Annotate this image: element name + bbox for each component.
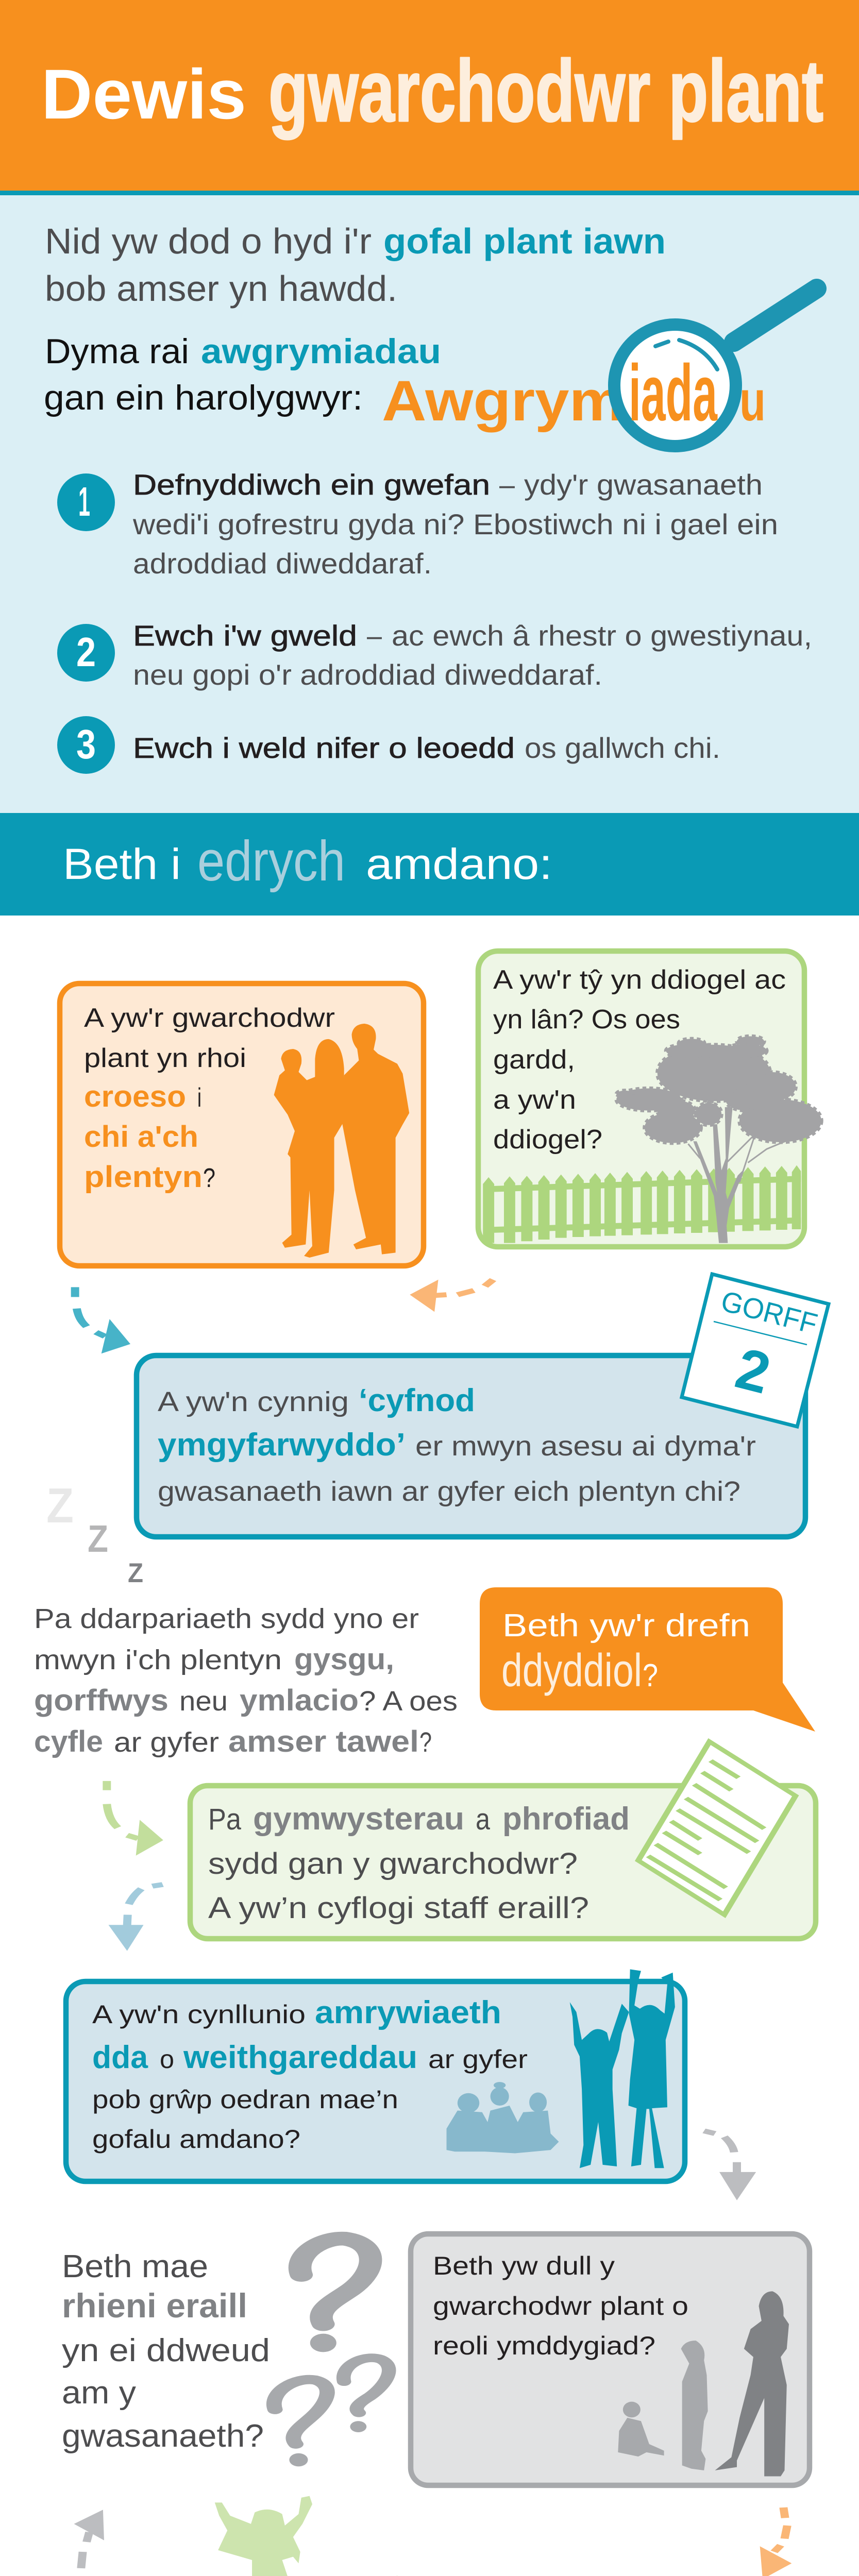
icon: magnifying glass with Awgrymiadau: u <box>739 369 766 433</box>
safe home text: ddiogel? <box>493 1125 602 1155</box>
title <box>41 42 823 140</box>
qualifications text: sydd gan y gwarchodwr? <box>208 1847 578 1880</box>
intro text: Dyma rai <box>45 332 189 371</box>
activities text: o <box>160 2045 174 2074</box>
tip 1: 1 <box>78 479 90 524</box>
text block: rest and sleep: cyfle <box>34 1725 103 1758</box>
text block: rest and sleep <box>34 1603 458 1758</box>
arrow: green dashed <box>107 1781 163 1856</box>
settling text: gwasanaeth iawn ar gyfer eich plentyn chi? <box>158 1476 740 1507</box>
intro text: gan ein harolygwyr: <box>44 378 363 417</box>
tip 1: adroddiad diweddaraf. <box>133 547 432 580</box>
welcome text: chi a'ch <box>84 1120 198 1154</box>
safe home text: a yw'n <box>493 1085 576 1115</box>
welcome text: i <box>197 1083 201 1113</box>
activities text <box>92 1995 528 2154</box>
activities text: ar gyfer <box>428 2045 528 2074</box>
text block: rest and sleep: mwyn i'ch plentyn <box>34 1645 282 1675</box>
icon: calendar: GORFF <box>718 1284 821 1340</box>
text block: other parents: Beth mae <box>62 2249 208 2284</box>
panel: introduction <box>0 195 859 813</box>
welcome text: plentyn <box>84 1160 203 1194</box>
tip 2: – <box>367 619 382 652</box>
text block: other parents: am y <box>62 2375 136 2411</box>
arrow: grey dashed down <box>704 2131 756 2200</box>
section heading band <box>0 813 859 916</box>
icon: tree <box>616 1036 821 1243</box>
activities text: dda <box>92 2040 148 2075</box>
qualifications text: A yw’n cyflogi staff eraill? <box>208 1891 589 1925</box>
qualifications text <box>208 1801 630 1925</box>
tip 2 <box>57 619 812 691</box>
section heading band: amdano: <box>366 840 552 888</box>
text block: rest and sleep: amser tawel <box>228 1725 419 1758</box>
tip 1: – <box>499 468 515 501</box>
settling text: A yw'n cynnig <box>158 1386 349 1417</box>
welcome text: plant yn rhoi <box>84 1043 246 1073</box>
tip 1 <box>57 468 778 580</box>
welcome text: croeso <box>84 1080 186 1113</box>
arrow: grey dashed up <box>74 2510 104 2576</box>
speech bubble: daily routine <box>480 1587 815 1732</box>
panel: welcome <box>60 984 424 1266</box>
tip 2: 2 <box>76 629 96 675</box>
text block: rest and sleep: ? <box>419 1727 432 1758</box>
icon: magnifying glass with Awgrymiadau: iada <box>629 348 718 437</box>
arrow: blue dashed <box>75 1287 130 1353</box>
qualifications text: a <box>476 1803 491 1836</box>
arrow: orange dashed <box>410 1280 493 1312</box>
icon: magnifying glass with Awgrymiadau: Awgrym <box>382 369 624 433</box>
activities text: amrywiaeth <box>315 1995 501 2030</box>
panel: safe home <box>478 951 821 1247</box>
icon: calendar <box>682 1274 829 1427</box>
panel: behaviour <box>411 2234 810 2485</box>
qualifications text: gymwysterau <box>253 1801 464 1837</box>
welcome text: ? <box>203 1163 215 1193</box>
icon: seated children <box>447 2082 559 2153</box>
icon: family silhouette <box>274 1024 409 1258</box>
text block: rest and sleep: ymlacio <box>240 1684 359 1717</box>
settling text: er mwyn asesu ai dyma'r <box>415 1431 756 1462</box>
tip 2: ac ewch â rhestr o gwestiynau, <box>392 619 812 652</box>
title: Dewis <box>41 55 246 134</box>
activities text: gofalu amdano? <box>92 2125 300 2154</box>
icon: adult, child and baby silhouettes <box>618 2291 789 2476</box>
tip 1: ydy'r gwasanaeth <box>524 468 763 501</box>
safe home text: A yw'r tŷ yn ddiogel ac <box>493 965 786 995</box>
speech bubble: daily routine: Beth yw'r drefn <box>502 1608 750 1643</box>
icon: jumping child <box>209 2496 335 2576</box>
text block: rest and sleep: gorffwys <box>34 1684 169 1717</box>
tip 3: 3 <box>76 721 96 767</box>
qualifications text: Pa <box>208 1803 242 1836</box>
text block: rest and sleep: neu <box>179 1686 228 1717</box>
text block: rest and sleep: ? A oes <box>359 1686 458 1717</box>
panel: healthy food <box>61 2496 471 2576</box>
text block: rest and sleep: ar gyfer <box>114 1727 219 1758</box>
speech bubble: daily routine: ddyddiol <box>501 1645 642 1697</box>
panel: activities <box>66 1969 685 2181</box>
icon: magnifying glass with Awgrymiadau <box>382 289 817 446</box>
tip 2: Ewch i'w gweld <box>133 619 357 652</box>
tip 1: wedi'i gofrestru gyda ni? Ebostiwch ni i gael ein <box>132 508 778 540</box>
activities text: pob grŵp oedran mae’n <box>92 2085 398 2114</box>
text block: rest and sleep: gysgu, <box>294 1642 394 1676</box>
behaviour text: reoli ymddygiad? <box>433 2331 655 2360</box>
arrow: orange dashed down <box>760 2507 791 2576</box>
tip 3: Ewch i weld nifer o leoedd <box>133 732 515 764</box>
behaviour text <box>433 2251 688 2360</box>
arrow: green dashed left <box>374 2575 466 2576</box>
intro text: bob amser yn hawdd. <box>45 268 397 309</box>
safe home text <box>493 965 786 1155</box>
intro text: Nid yw dod o hyd i'r <box>45 221 372 261</box>
header banner <box>0 0 859 195</box>
section heading band: edrych <box>197 829 345 893</box>
speech bubble: daily routine: ? <box>643 1658 658 1693</box>
settling text <box>158 1383 756 1507</box>
icon: children with arms raised <box>570 1969 675 2168</box>
settling text: ‘cyfnod <box>359 1383 475 1418</box>
icon: question marks <box>274 2239 389 2466</box>
icon: sleeping Zs: Z <box>88 1517 108 1560</box>
activities text: A yw'n cynllunio <box>92 2000 306 2029</box>
icon: sleeping Zs: Z <box>46 1478 74 1533</box>
welcome text: A yw'r gwarchodwr <box>84 1003 335 1033</box>
tip 1: Defnyddiwch ein gwefan <box>133 468 490 501</box>
panel: settling in period <box>137 1355 805 1537</box>
arrow: pale blue dashed <box>109 1885 163 1951</box>
activities text: weithgareddau <box>183 2040 417 2075</box>
icon: sleeping Zs <box>46 1478 143 1588</box>
safe home text: yn lân? Os oes <box>493 1005 680 1035</box>
icon: fence <box>483 1165 801 1243</box>
qualifications text: phrofiad <box>502 1801 630 1837</box>
text block: other parents: rhieni eraill <box>62 2286 247 2325</box>
intro text: awgrymiadau <box>201 332 441 371</box>
intro text: gofal plant iawn <box>383 221 666 261</box>
icon: calendar: 2 <box>730 1335 777 1406</box>
tip 3 <box>57 716 720 774</box>
behaviour text: gwarchodwr plant o <box>433 2292 688 2320</box>
text block: other parents <box>62 2249 270 2454</box>
welcome text <box>84 1003 335 1194</box>
icon: document <box>638 1741 796 1915</box>
panel: qualifications <box>190 1741 816 1939</box>
text block: other parents: gwasanaeth? <box>62 2418 264 2454</box>
tip 3: os gallwch chi. <box>525 732 720 764</box>
behaviour text: Beth yw dull y <box>433 2251 615 2280</box>
icon: sleeping Zs: Z <box>128 1558 143 1588</box>
text block: rest and sleep: Pa ddarpariaeth sydd yno er <box>34 1603 419 1634</box>
settling text: ymgyfarwyddo’ <box>158 1427 406 1463</box>
text block: other parents: yn ei ddweud <box>62 2333 270 2368</box>
intro text <box>44 221 666 417</box>
tip 2: neu gopi o'r adroddiad diweddaraf. <box>133 658 602 691</box>
section heading band: Beth i <box>63 840 181 888</box>
safe home text: gardd, <box>493 1045 575 1075</box>
